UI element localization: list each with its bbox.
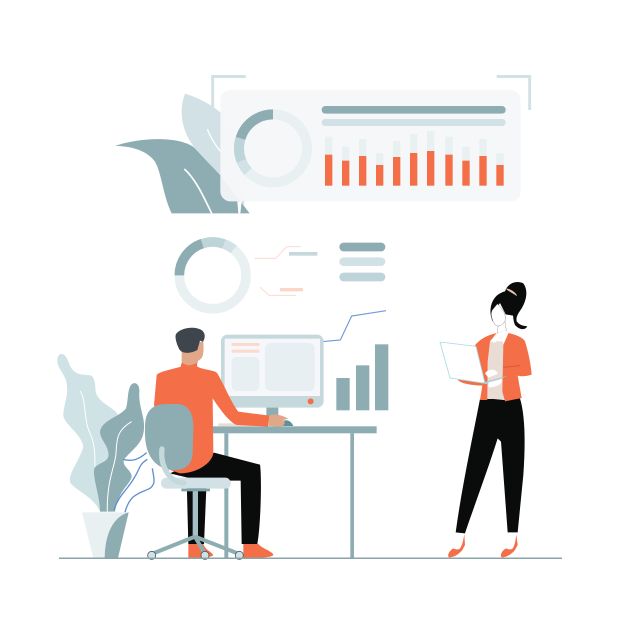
plant pot <box>82 512 129 558</box>
hands <box>485 370 502 387</box>
light plant leaf <box>57 354 118 512</box>
collar <box>490 330 508 345</box>
hair with ponytail <box>490 282 527 329</box>
man <box>154 328 288 558</box>
legend pills <box>339 243 385 281</box>
computer mouse <box>280 420 293 426</box>
hair band <box>507 289 517 296</box>
floating donut chart <box>179 242 246 309</box>
office chair <box>145 404 243 559</box>
desk and seated man <box>145 328 377 559</box>
panel donut chart <box>239 114 307 182</box>
ground line <box>59 558 562 559</box>
standing woman <box>440 282 532 557</box>
neck <box>497 322 507 333</box>
panel bar chart <box>325 131 504 186</box>
light leaf vein <box>80 391 95 467</box>
shoes <box>188 544 273 558</box>
rear leg <box>187 480 207 544</box>
face <box>491 304 506 326</box>
jacket <box>457 333 532 401</box>
chair back <box>145 404 193 470</box>
orange sweater <box>154 363 269 473</box>
computer monitor <box>221 335 324 418</box>
corner brackets <box>213 76 530 113</box>
dashboard panel <box>220 90 521 201</box>
chair base <box>152 537 239 554</box>
chair column <box>193 490 198 538</box>
potted plant <box>57 354 154 558</box>
paper on desk <box>218 423 268 426</box>
trousers <box>456 398 525 533</box>
sleeve crease <box>503 366 520 367</box>
hand <box>269 414 288 427</box>
top dashboard scene <box>115 76 530 213</box>
dark leaf vein <box>107 422 132 512</box>
laptop <box>440 342 508 384</box>
large plant leaves <box>115 94 250 213</box>
blouse <box>487 341 507 399</box>
desk <box>212 426 377 558</box>
blue plant stems <box>114 453 154 512</box>
panel header lines <box>322 106 506 126</box>
hair <box>176 328 205 353</box>
donut callout lines <box>254 247 317 295</box>
neck and head skin <box>182 342 204 365</box>
high heels <box>448 534 518 557</box>
chair arm <box>162 449 184 483</box>
chair seat <box>161 478 231 489</box>
growth bars <box>336 344 388 410</box>
front leg <box>170 453 261 544</box>
trend line <box>322 311 386 342</box>
chair wheels <box>148 551 243 559</box>
seat plate <box>181 489 210 491</box>
middle charts and monitor <box>179 242 388 418</box>
dark plant leaf <box>94 383 144 512</box>
